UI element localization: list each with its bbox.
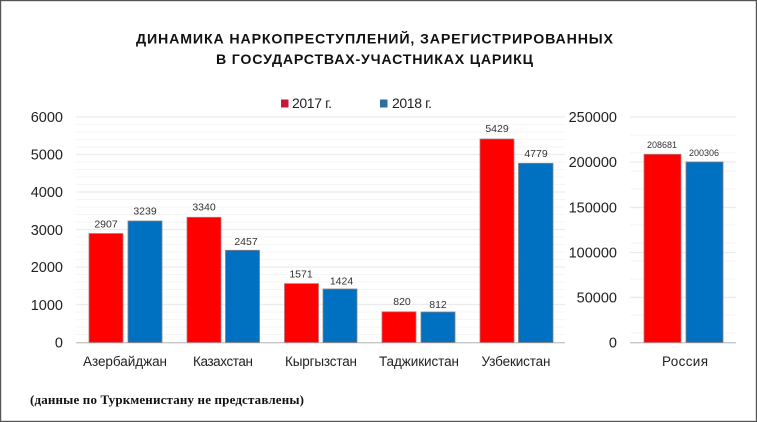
data labels: 1424: [330, 276, 353, 288]
right axis labels: 50000: [577, 290, 617, 306]
title: В ГОСУДАРСТВАХ-УЧАСТНИКАХ ЦАРИКЦ: [216, 52, 534, 68]
data labels: 1571: [289, 268, 313, 280]
data labels: [94, 123, 548, 311]
country labels: Узбекистан: [482, 354, 550, 369]
left axis labels: [31, 110, 63, 352]
title: ДИНАМИКА НАРКОПРЕСТУПЛЕНИЙ, ЗАРЕГИСТРИРОВАННЫХ: [136, 30, 614, 48]
left axis labels: 5000: [31, 148, 63, 164]
bars: 2018: [128, 162, 723, 342]
right axis labels: 150000: [569, 200, 617, 216]
russia data labels: 200306: [689, 148, 719, 158]
data labels: 4779: [524, 148, 548, 160]
data labels: 3239: [133, 206, 157, 218]
left axis labels: 0: [55, 336, 63, 352]
footnote: (данные по Туркменистану не представлены): [30, 392, 304, 407]
data labels: 5429: [485, 123, 509, 135]
left axis labels: 4000: [31, 185, 63, 201]
data labels: 812: [429, 299, 447, 311]
left axis labels: 3000: [31, 223, 63, 239]
data labels: 2907: [94, 218, 118, 230]
legend: 2018 г.: [392, 95, 432, 111]
right axis labels: 250000: [569, 110, 617, 126]
title: [136, 30, 614, 68]
right axis labels: 0: [609, 336, 617, 352]
right axis labels: 100000: [569, 246, 617, 262]
country labels: Азербайджан: [83, 354, 167, 369]
right axis labels: 200000: [569, 155, 617, 171]
data labels: 2457: [234, 236, 258, 248]
country labels: [83, 354, 708, 369]
russia data labels: [647, 140, 719, 158]
country labels: Казахстан: [193, 354, 253, 369]
bars: 2017: [89, 139, 681, 342]
russia data labels: 208681: [647, 140, 677, 150]
data labels: 820: [393, 296, 411, 308]
left axis labels: 1000: [31, 298, 63, 314]
legend: [281, 95, 432, 111]
left axis labels: 2000: [31, 260, 63, 276]
legend: 2017 г.: [292, 95, 332, 111]
country labels: Россия: [662, 354, 708, 369]
country labels: Таджикистан: [379, 354, 459, 369]
right axis labels: [569, 110, 617, 352]
left axis labels: 6000: [31, 110, 63, 126]
data labels: 3340: [192, 202, 216, 214]
country labels: Кыргызстан: [285, 354, 357, 369]
